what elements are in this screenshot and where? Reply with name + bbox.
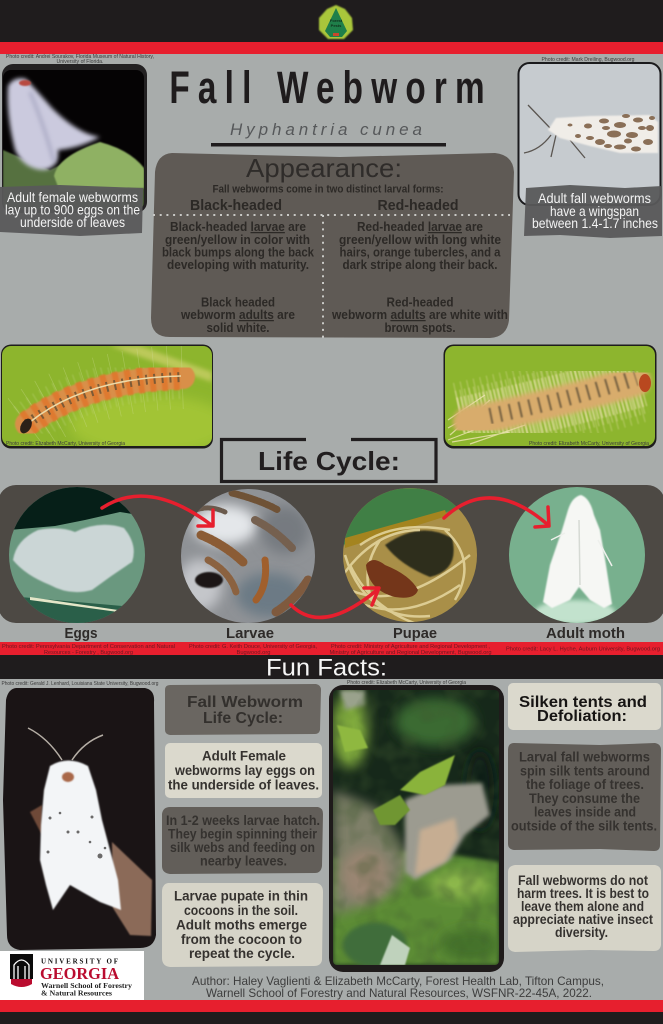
panel: appearance: brown spots.	[384, 321, 456, 335]
author credit: Author: Haley Vaglienti & Elizabeth McCarty, Forest Health Lab, Tifton Campus,	[192, 974, 604, 988]
panel: larvae hatch: nearby leaves.	[200, 852, 287, 868]
panel: appearance: Red-headed	[386, 296, 454, 310]
caption: adult female moth: Adult female webworms	[7, 189, 138, 205]
panel: larvae pupate: cocoons in the soil.	[184, 902, 298, 918]
panel: do not harm trees: leave them alone and	[521, 898, 644, 914]
panel: appearance: dark stripe along their back.	[342, 258, 498, 272]
panel: appearance: webworm adults are white with	[331, 308, 508, 322]
panel: silk tents description: Larval fall webworms	[519, 748, 650, 764]
panel: appearance: green/yellow in color with	[165, 233, 310, 247]
photo: eggs	[9, 487, 145, 625]
panel: appearance: Red-headed larvae are	[357, 220, 483, 234]
photo credits bar: Photo credit: Lacy L. Hyche, Auburn University, Bugwood.org	[506, 646, 660, 652]
photo: pupae	[343, 488, 477, 625]
heading band: fun facts	[0, 654, 663, 682]
panel: appearance: solid white.	[206, 321, 270, 335]
panel: silken tents heading: Defoliation:	[537, 708, 627, 725]
panel: larvae hatch	[162, 807, 323, 874]
photo credit: adult spotted moth: Photo credit: Mark Dreiling, Bugwood.org	[542, 57, 634, 63]
photo credit: black-headed caterpillar: Photo credit: Elizabeth McCarty, University of Georgia	[6, 441, 126, 447]
panel: do not harm trees: diversity.	[555, 924, 608, 940]
caption: adult spotted moth: Adult fall webworms	[538, 190, 651, 206]
panel: larvae pupate: Adult moths emerge	[176, 916, 307, 932]
heading: appearance: Appearance:	[246, 153, 402, 183]
photo credit: adult female: Photo credit: Andrei Sourakov, Florida Museum of Natural History,	[6, 54, 154, 60]
heading: life cycle: Life Cycle:	[258, 446, 400, 476]
caption: adult female moth: lay up to 900 eggs on the	[5, 202, 140, 218]
photo credits bar: Photo credit: G. Keith Douce, University of Georgia,	[189, 644, 317, 650]
panel: silk tents description: the foliage of trees.	[526, 776, 644, 792]
panel: appearance: hairs, orange tubercles, and a	[340, 246, 501, 260]
photo: adult female moth with eggs	[2, 64, 147, 213]
photo: larvae	[178, 488, 316, 624]
logo: University of Georgia: Warnell School of Forestry	[41, 981, 132, 990]
panel: appearance: Black-headed larvae are	[170, 220, 306, 234]
panel: larvae pupate: repeat the cycle.	[189, 945, 295, 961]
panel: adult female lays eggs: webworms lay eggs on	[174, 762, 315, 778]
panel: appearance: black bumps along the back	[162, 246, 314, 260]
bottom banner	[0, 1000, 663, 1024]
panel: appearance: Black headed	[201, 296, 275, 310]
panel: silk tents description	[508, 743, 661, 851]
caption: adult spotted moth	[524, 185, 662, 238]
panel: silken tents heading	[508, 683, 661, 730]
arrow: eggs to larvae	[102, 496, 213, 526]
panel: silk tents description: They consume the	[529, 790, 640, 806]
icon: Forest Pests logo	[319, 5, 353, 39]
label: eggs: Eggs	[64, 625, 98, 642]
photo credits bar: Ministry of Agriculture and Regional Development, Bugwood.org	[330, 650, 492, 656]
panel: do not harm trees: Fall webworms do not	[518, 872, 648, 888]
panel: appearance: Red-headed	[378, 197, 458, 214]
panel: appearance	[151, 153, 514, 338]
logo: University of Georgia	[0, 951, 144, 1000]
panel: life cycle band	[0, 485, 663, 625]
arrow: pupae to adult	[444, 498, 549, 527]
panel: appearance: webworm adults are	[180, 308, 295, 322]
photo: red-headed caterpillar	[444, 344, 656, 448]
photo credits bar: Photo credit: Ministry of Agriculture and Regional Development ,	[331, 644, 490, 650]
photo credit: red-headed caterpillar: Photo credit: Elizabeth McCarty, University of Georgia	[529, 441, 650, 447]
caption: adult female moth	[0, 185, 143, 236]
title: Fall Webworm	[169, 63, 485, 113]
subtitle: scientific name: Hyphantria cunea	[230, 120, 422, 139]
photo credit: adult female	[6, 54, 154, 65]
caption: adult female moth: underside of leaves	[20, 214, 125, 230]
photo credit: white moth: Photo credit: Gerald J. Lenhard, Louisiana State University, Bugwood.org	[2, 681, 158, 687]
logo: University of Georgia: GEORGIA	[40, 964, 120, 983]
photo: black-headed caterpillar	[1, 344, 213, 448]
photo: adult spotted moth	[518, 63, 660, 205]
photo: white moth on branch	[3, 688, 156, 950]
label: larvae: Larvae	[226, 625, 274, 642]
photo: silk tent in tree	[329, 685, 504, 972]
panel: larvae pupate: Larvae pupate in thin	[174, 888, 308, 904]
author credit	[192, 974, 604, 1000]
photo credits bar: Resources - Forestry , Bugwood.org	[44, 650, 133, 656]
panel: adult female lays eggs	[165, 743, 322, 798]
panel: larvae hatch: They begin spinning their	[168, 826, 317, 842]
panel: silk tents description: spin silk tents around	[520, 762, 650, 778]
caption: adult spotted moth: have a wingspan	[550, 203, 639, 219]
panel: silk tents description: leaves inside and	[534, 804, 636, 820]
icon: Forest Pests logo: Pests	[331, 23, 342, 28]
panel: appearance: Fall webworms come in two distinct larval forms:	[212, 184, 444, 196]
panel: do not harm trees	[508, 865, 661, 952]
logo: University of Georgia: & Natural Resources	[41, 988, 112, 998]
label: pupae: Pupae	[393, 625, 437, 642]
panel: fall webworm life cycle heading: Fall Webworm	[187, 694, 303, 711]
heading band: fun facts: Fun Facts:	[266, 654, 387, 682]
author credit: Warnell School of Forestry and Natural Resources, WSFNR-22-45A, 2022.	[206, 986, 592, 1000]
logo: University of Georgia: UNIVERSITY OF	[41, 958, 118, 966]
panel: appearance: Black-headed	[190, 197, 282, 214]
panel: appearance: developing with maturity.	[167, 258, 309, 272]
panel: silken tents heading: Silken tents and	[519, 694, 647, 711]
label: adult moth: Adult moth	[546, 625, 625, 642]
arrow: larvae to pupae	[291, 588, 379, 617]
panel: fall webworm life cycle heading: Life Cycle:	[203, 710, 283, 727]
photo: adult moth	[509, 487, 645, 624]
panel: adult female lays eggs: Adult Female	[202, 748, 286, 764]
top banner	[0, 0, 663, 54]
panel: larvae hatch: silk webs and feeding on	[170, 839, 315, 855]
photo credit: adult female: University of Florida.	[56, 59, 104, 65]
panel: larvae hatch: In 1-2 weeks larvae hatch.	[166, 812, 320, 828]
icon: Forest Pests logo: Forest	[330, 18, 343, 23]
title underline	[211, 143, 446, 146]
photo credits bar	[0, 642, 663, 656]
panel: larvae pupate: from the cocoon to	[181, 931, 302, 947]
photo credits bar: Bugwood.org	[236, 650, 270, 656]
panel: appearance: green/yellow with long white	[339, 233, 501, 247]
photo credits bar: Photo credit: Pennsylvania Department of Conservation and Natural	[2, 644, 175, 650]
photo credit: silk tent: Photo credit: Elizabeth McCarty, University of Georgia	[347, 680, 467, 686]
panel: fall webworm life cycle heading	[165, 684, 321, 735]
heading: life cycle	[222, 440, 436, 482]
panel: larvae pupate	[162, 883, 323, 967]
panel: adult female lays eggs: the underside of leaves.	[168, 776, 319, 792]
